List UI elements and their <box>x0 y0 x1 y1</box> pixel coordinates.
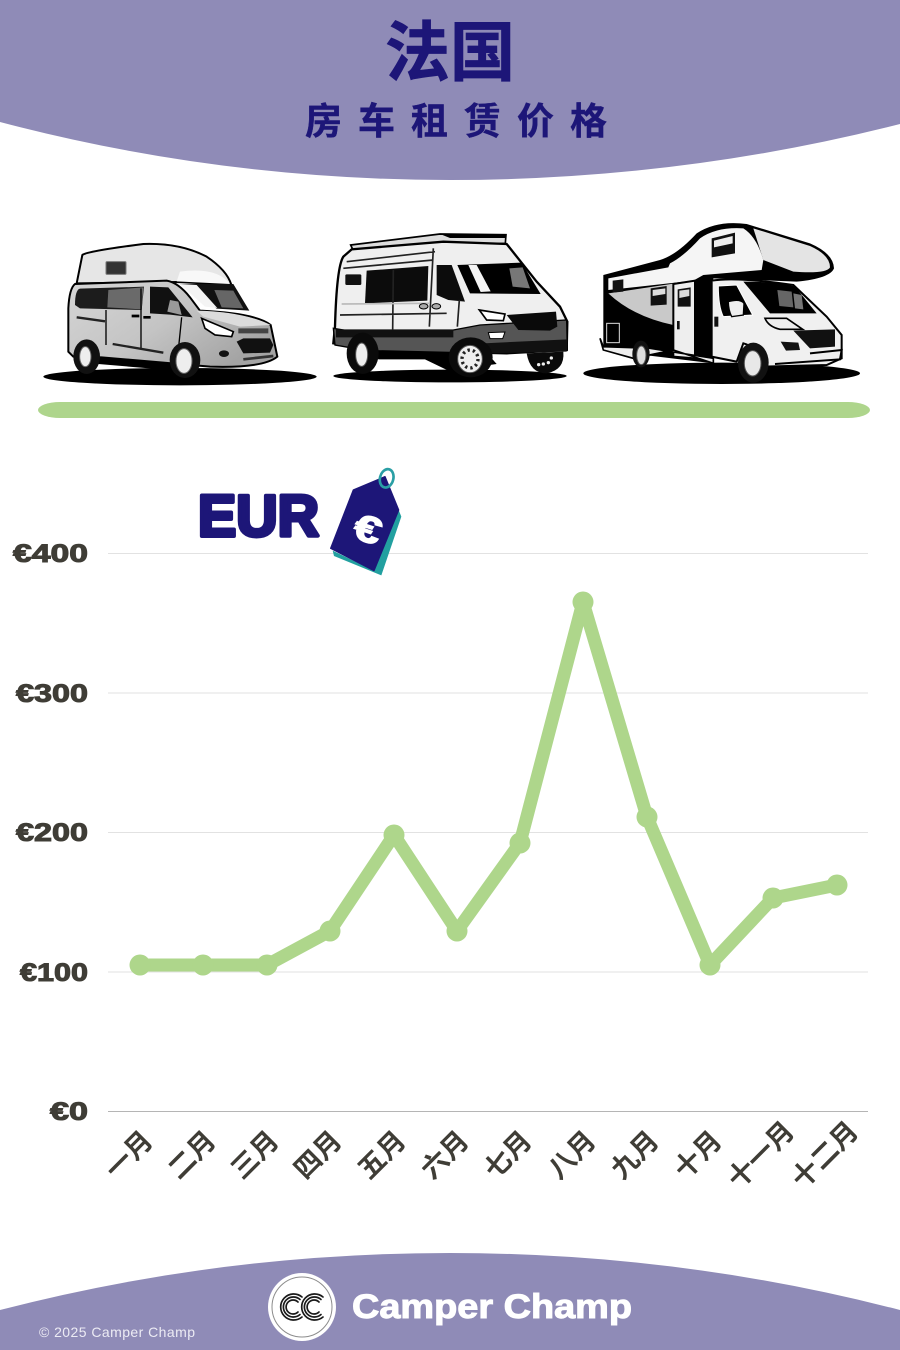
y axis labels <box>13 540 88 1126</box>
header banner <box>0 0 900 180</box>
footer banner <box>0 1253 900 1350</box>
data points <box>130 592 848 976</box>
y axis labels: €100 <box>20 959 88 987</box>
y axis labels: €0 <box>50 1098 88 1126</box>
x axis month labels: 三月 <box>225 1125 285 1185</box>
logo badge <box>268 1273 336 1341</box>
x axis month labels: 五月 <box>352 1125 412 1185</box>
x axis month labels: 十一月 <box>722 1116 800 1194</box>
icon: euro price tag: € <box>348 506 387 554</box>
data line <box>140 602 837 965</box>
y axis labels: €400 <box>13 540 88 568</box>
y axis labels: €300 <box>16 680 88 708</box>
x axis month labels: 六月 <box>415 1125 475 1185</box>
x axis month labels <box>99 1116 864 1194</box>
illustration: black and white alcove motorhome <box>583 223 860 384</box>
x axis month labels: 二月 <box>162 1125 222 1185</box>
x axis month labels: 十月 <box>668 1125 728 1185</box>
subtitle: 房车租赁价格 <box>305 101 623 142</box>
title: 法国 <box>385 16 515 89</box>
x axis month labels: 十二月 <box>786 1116 864 1194</box>
currency label: EUR: EUR <box>198 484 319 549</box>
x axis month labels: 四月 <box>288 1125 348 1185</box>
y axis grid lines <box>108 554 868 1112</box>
line chart: monthly rental price <box>13 540 868 1194</box>
x axis month labels: 一月 <box>99 1125 159 1185</box>
brand name: Camper Champ <box>352 1288 632 1326</box>
x axis month labels: 九月 <box>605 1125 665 1185</box>
x axis month labels: 七月 <box>478 1125 538 1185</box>
illustration: silver high-top campervan <box>43 244 317 385</box>
icon: euro price tag <box>331 468 401 575</box>
x axis month labels: 八月 <box>542 1125 602 1185</box>
y axis labels: €200 <box>16 819 88 847</box>
copyright: © 2025 Camper Champ <box>39 1324 195 1340</box>
illustration: white and black panel van <box>333 234 567 382</box>
green divider bar <box>38 402 870 418</box>
